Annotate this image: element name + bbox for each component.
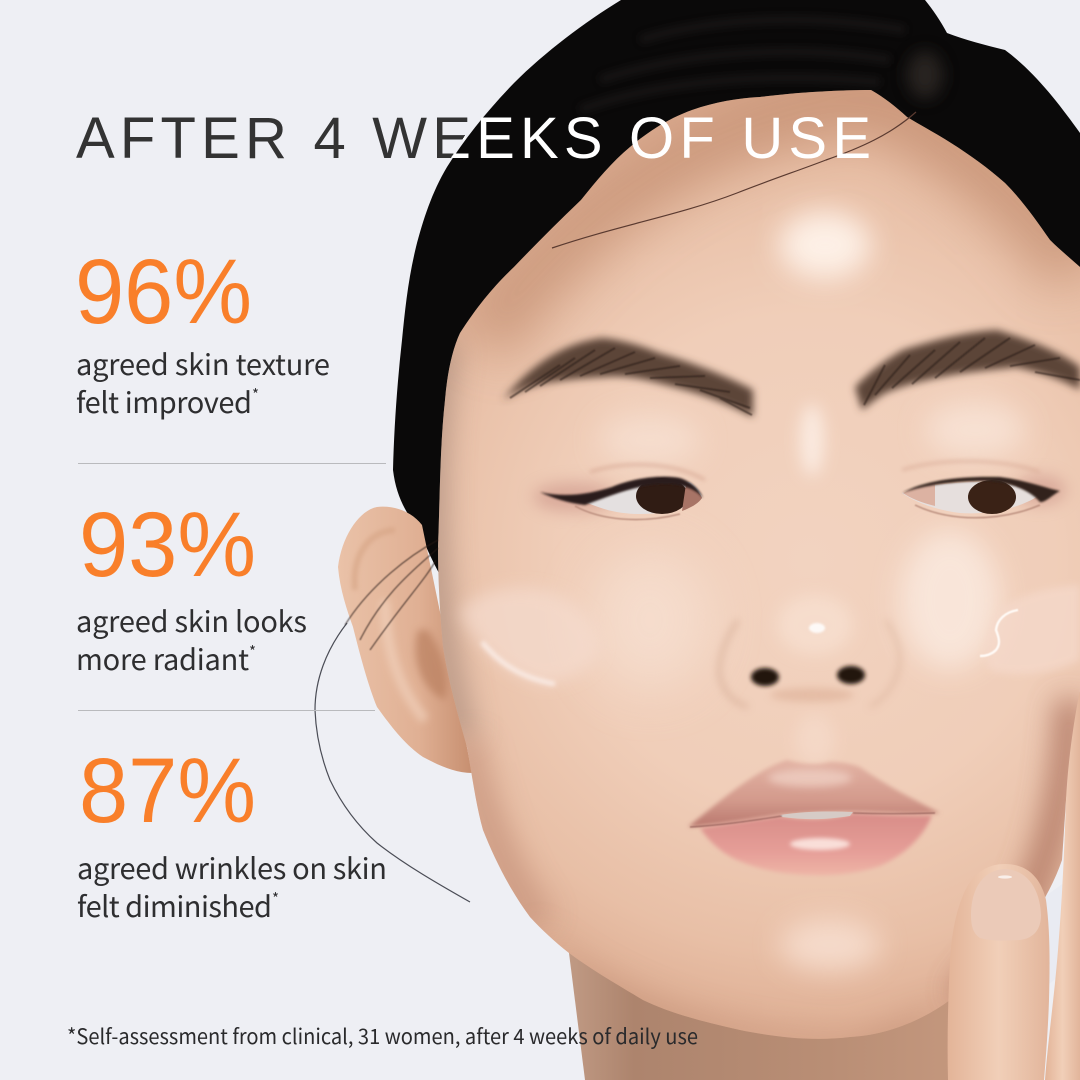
right eyebrow (855, 330, 1080, 410)
background gap between fingers (1040, 880, 1068, 990)
hair wisps over ear (345, 540, 438, 650)
lips (688, 760, 940, 875)
description: felt diminished (77, 884, 272, 926)
description: * (249, 641, 256, 662)
left eye (533, 465, 705, 520)
description: * (252, 384, 259, 405)
stat: 93% skin radiance (76, 494, 307, 679)
footnote: *Self-assessment from clinical, 31 women, after 4 weeks of daily use (67, 1021, 698, 1051)
flyaway hair by ear (315, 623, 470, 902)
divider (78, 463, 386, 464)
loose hair strand (552, 112, 916, 248)
figure 93%: 93% (79, 494, 256, 596)
hand fingers (948, 690, 1080, 1080)
figure 87%: 87% (79, 740, 256, 842)
neck (569, 900, 1000, 1080)
nose (719, 595, 900, 707)
description: agreed skin looks (76, 599, 307, 641)
description: * (272, 888, 279, 909)
description: agreed skin texture (76, 342, 330, 384)
title: AFTER 4 WEEKS OF USE (76, 106, 871, 171)
figure 96%: 96% (75, 241, 252, 343)
left eyebrow (503, 338, 753, 417)
description: more radiant (76, 637, 249, 679)
face (438, 90, 1080, 1039)
divider (78, 710, 375, 711)
description: felt improved (76, 380, 252, 422)
skin shading (432, 95, 1080, 1060)
description: agreed wrinkles on skin (77, 846, 387, 888)
right eye (902, 461, 1066, 518)
stat: 96% skin texture (75, 241, 330, 422)
cream swatch on right cheek (980, 585, 1080, 674)
portrait photo illustration (315, 0, 1080, 1080)
ear (338, 507, 472, 773)
cream swatch on left cheek (460, 588, 600, 684)
hair (393, 0, 1080, 575)
stat: 87% wrinkles (77, 740, 387, 926)
